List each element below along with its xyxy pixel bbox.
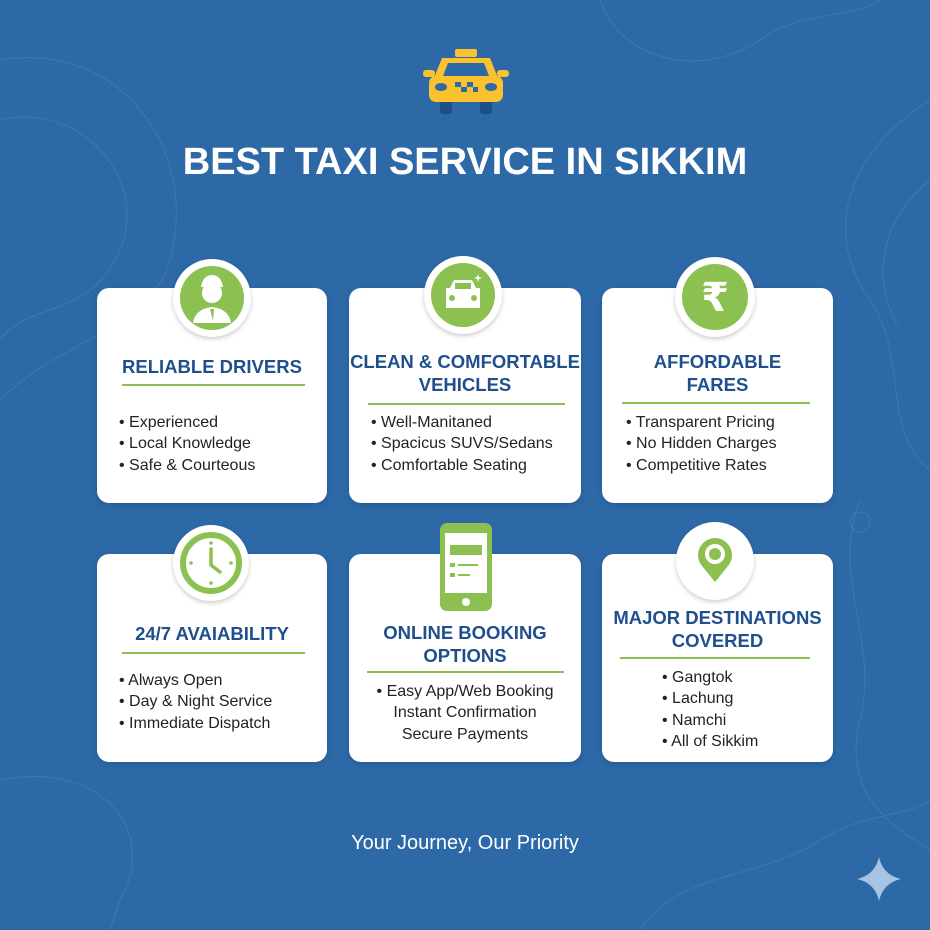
bullets: • All of Sikkim <box>662 733 758 750</box>
panel: affordable fares <box>602 288 833 503</box>
panel: reliable drivers <box>97 288 327 503</box>
icon: rupee <box>675 257 755 337</box>
bullets: • Lachung <box>662 690 733 707</box>
bullets: • Gangtok <box>662 669 733 686</box>
heading <box>654 351 781 395</box>
panel: destinations <box>602 554 833 762</box>
bullets: • Immediate Dispatch <box>119 715 270 732</box>
heading: RELIABLE DRIVERS <box>122 356 302 377</box>
icon: clock <box>173 525 249 601</box>
panel: 24/7 <box>97 554 327 762</box>
icon: pin <box>676 522 754 600</box>
bullets <box>662 669 758 750</box>
icon: car <box>424 256 502 334</box>
heading: FARES <box>687 374 748 395</box>
bullets: • Always Open <box>119 672 222 689</box>
bullets: Secure Payments <box>402 726 528 743</box>
panel: clean vehicles <box>349 288 581 503</box>
heading: MAJOR DESTINATIONS <box>613 607 822 628</box>
bullets: • Day & Night Service <box>119 693 272 710</box>
bullets: • Well-Manitaned <box>371 414 492 431</box>
heading: AFFORDABLE <box>654 351 781 372</box>
bullets: • Safe & Courteous <box>119 457 255 474</box>
heading <box>613 607 822 651</box>
icon: rupee: ₹ <box>701 275 729 321</box>
heading: ONLINE BOOKING <box>383 622 547 643</box>
heading: VEHICLES <box>419 374 511 395</box>
title: BEST TAXI SERVICE IN SIKKIM <box>183 141 747 183</box>
bullets <box>377 683 553 743</box>
bullets: • Namchi <box>662 712 726 729</box>
bullets <box>371 414 553 474</box>
footer tagline: Your Journey, Our Priority <box>351 832 579 854</box>
heading: 24/7 AVAIABILITY <box>135 623 289 644</box>
bullets: • Experienced <box>119 414 218 431</box>
bullets: • No Hidden Charges <box>626 435 777 452</box>
icon: driver <box>173 259 251 337</box>
heading: CLEAN & COMFORTABLE <box>350 351 580 372</box>
bullets: • Local Knowledge <box>119 435 251 452</box>
icon: phone <box>440 523 492 611</box>
bullets <box>119 414 255 474</box>
bullets: Instant Confirmation <box>393 704 537 721</box>
bullets: • Transparent Pricing <box>626 414 775 431</box>
bullets: • Spacicus SUVS/Sedans <box>371 435 553 452</box>
heading: OPTIONS <box>423 645 507 666</box>
bullets: • Easy App/Web Booking <box>377 683 553 700</box>
bullets <box>626 414 777 474</box>
bullets <box>119 672 272 732</box>
heading <box>383 622 547 666</box>
icon: sparkle <box>857 857 901 901</box>
heading: COVERED <box>672 630 763 651</box>
icon: taxi <box>423 49 509 114</box>
bullets: • Competitive Rates <box>626 457 767 474</box>
bullets: • Comfortable Seating <box>371 457 527 474</box>
panel: online booking <box>349 554 581 762</box>
heading <box>350 351 580 395</box>
